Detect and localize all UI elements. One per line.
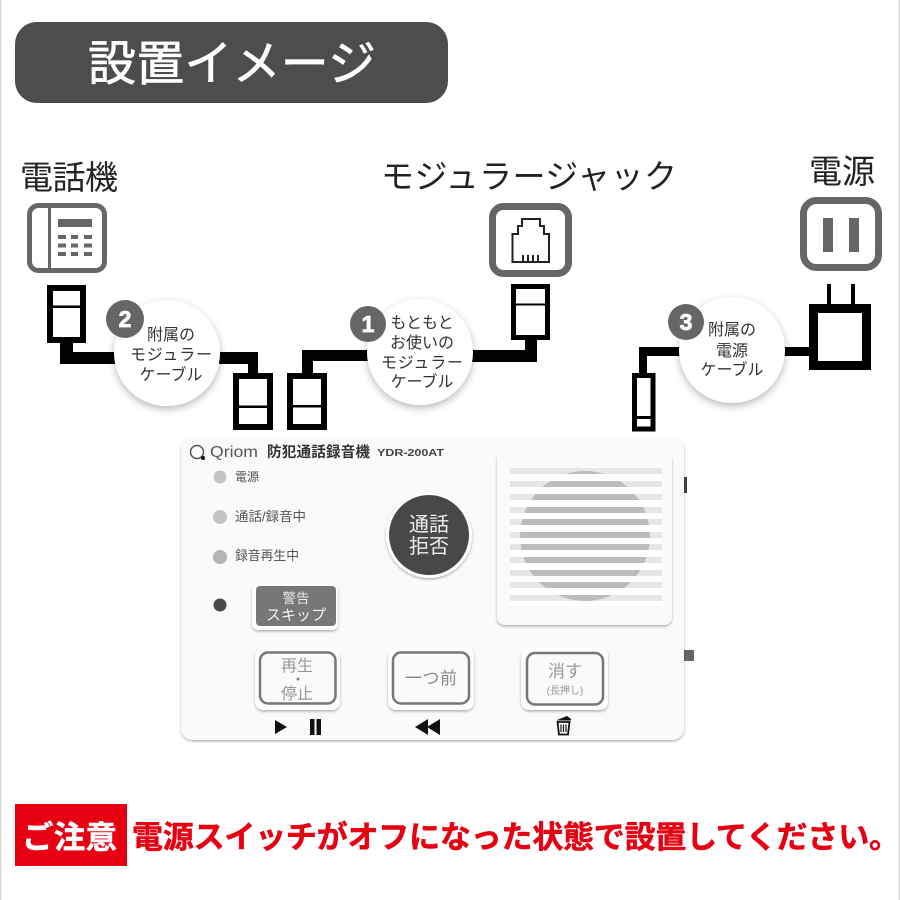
bubble 1: existing modular cable: もともと — [390, 314, 454, 332]
button: reject call — [386, 492, 472, 578]
logo: Qriom — [190, 444, 258, 461]
caution message: 電源スイッチがオフになった状態で設置してください。 — [132, 820, 900, 855]
icon: pause — [310, 719, 321, 735]
title banner — [15, 22, 448, 103]
button: play / stop: 停止 — [281, 685, 313, 703]
label: modular jack: モジュラージャック — [381, 158, 677, 195]
bubble 3: included power cable: ケーブル — [700, 360, 764, 379]
button: play / stop — [255, 648, 340, 710]
badge 3: 3 — [680, 309, 692, 335]
bubble 1: existing modular cable — [350, 299, 473, 405]
bubble 1: existing modular cable: モジュラー — [381, 355, 463, 372]
button: delete: 消す — [548, 662, 582, 681]
cable 1: jack side — [468, 286, 548, 362]
logo: Qriom: Qriom — [210, 444, 258, 461]
device: call recorder — [181, 437, 694, 740]
cable 3: AC adapter — [782, 284, 866, 366]
speaker panel — [497, 452, 672, 625]
bubble 1: existing modular cable: ケーブル — [390, 372, 454, 391]
button: skip warning — [252, 584, 338, 630]
badge 2: 2 — [119, 306, 131, 332]
button: reject call: 拒否 — [409, 535, 449, 558]
button: delete — [521, 648, 608, 710]
indicator: warning — [214, 598, 226, 612]
button: skip warning: スキップ — [266, 607, 326, 624]
bubble 3: included power cable — [668, 297, 785, 403]
button: delete: (長押し) — [547, 684, 583, 697]
bubble 1: existing modular cable: お使いの — [390, 334, 454, 352]
bubble 2: included modular cable: 附属の — [147, 326, 195, 344]
icon: power outlet — [804, 200, 878, 268]
indicator: playing — [213, 548, 299, 564]
caution tag: ご注意 — [22, 819, 117, 855]
device name: 防犯通話録音機 — [267, 443, 370, 461]
label: power source: 電源 — [809, 153, 875, 190]
button: previous: 一つ前 — [405, 669, 457, 688]
indicator: power: 電源 — [235, 470, 259, 484]
icon: telephone — [30, 206, 104, 270]
button: play / stop: 再生 — [281, 657, 313, 675]
icon: rewind — [415, 719, 440, 735]
title banner: 設置イメージ — [88, 38, 376, 91]
bubble 3: included power cable: 附属の — [708, 321, 756, 339]
cable 3: device side — [634, 347, 683, 429]
cable 2: telephone side — [50, 288, 120, 364]
bubble 2: included modular cable — [106, 300, 220, 406]
cable 1: device side — [290, 350, 372, 427]
button: skip warning: 警告 — [282, 591, 310, 606]
caution tag — [15, 804, 127, 866]
indicator: on call / recording: 通話/録音中 — [235, 509, 306, 524]
indicator: power — [214, 470, 259, 484]
bubble 2: included modular cable: モジュラー — [130, 347, 212, 364]
icon: trash can — [557, 716, 571, 734]
model number: YDR-200AT — [377, 448, 444, 459]
button: reject call: 通話 — [409, 513, 449, 536]
bubble 2: included modular cable: ケーブル — [139, 365, 203, 384]
badge 1: 1 — [362, 311, 375, 337]
cable 2: device side — [215, 352, 270, 427]
button: previous — [388, 648, 474, 710]
bubble 3: included power cable: 電源 — [716, 342, 748, 360]
icon: play — [275, 720, 287, 734]
label: telephone: 電話機 — [20, 159, 118, 196]
icon: modular jack socket — [492, 206, 568, 274]
indicator: playing: 録音再生中 — [235, 548, 299, 563]
